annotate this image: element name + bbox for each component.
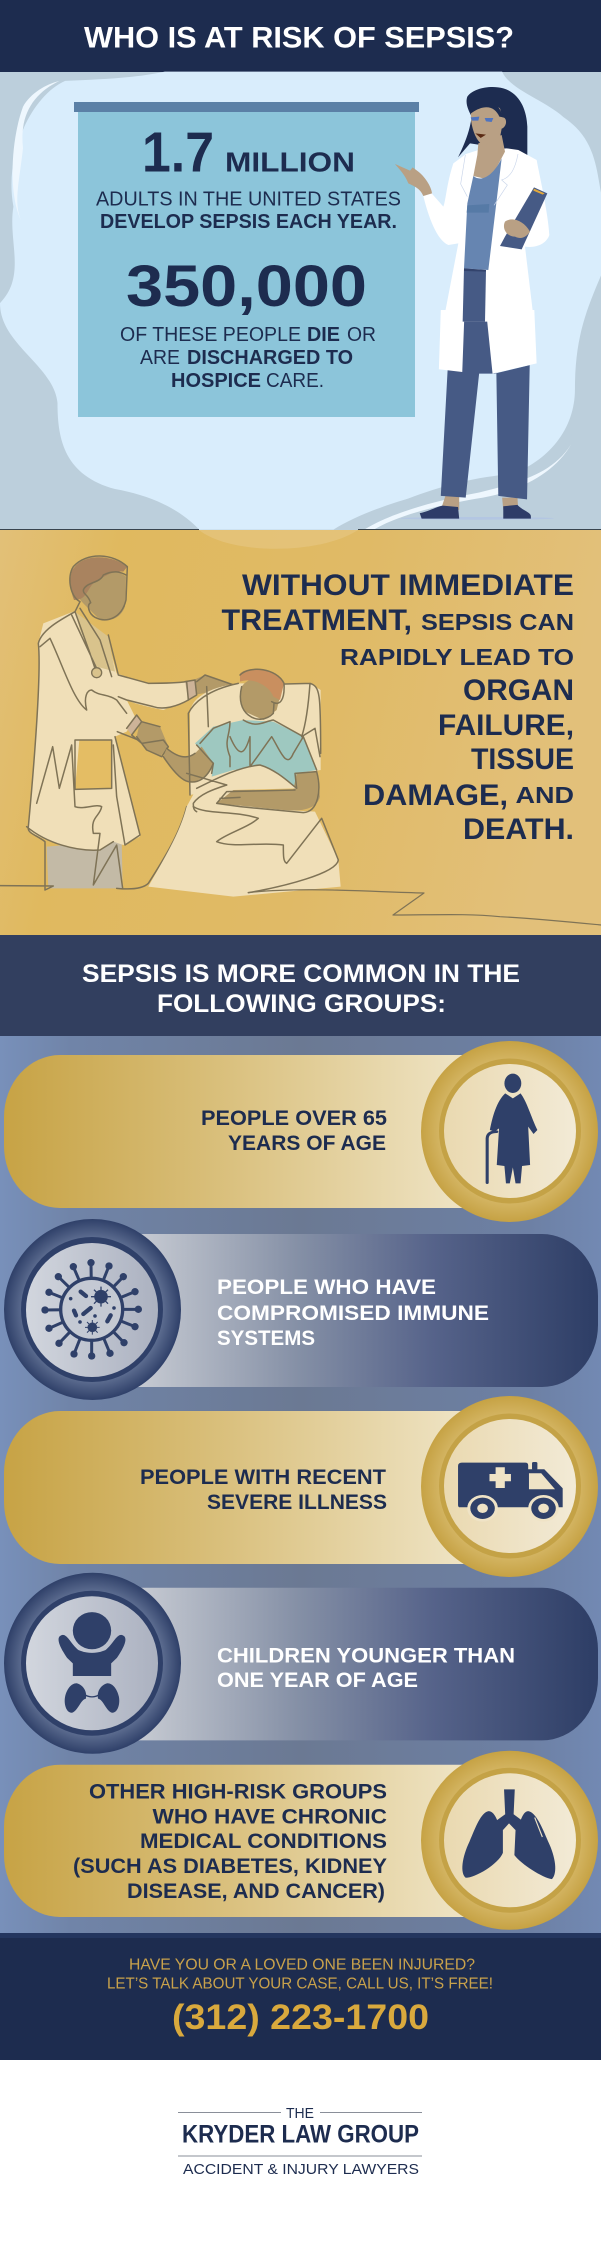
title: WHO IS AT RISK OF SEPSIS? xyxy=(84,22,514,54)
logo: Kryder Law Group: ACCIDENT & INJURY LAWYERS xyxy=(183,2162,419,2178)
text: without immediate treatment: SEPSIS CAN xyxy=(421,609,574,635)
text: compromised immune systems: PEOPLE WHO HAVE xyxy=(217,1276,436,1299)
text: without immediate treatment: FAILURE, xyxy=(438,709,574,742)
text: call to action xyxy=(107,1956,493,1992)
stat: 1.7 million: 1.7 xyxy=(142,120,214,184)
text: without immediate treatment: ORGAN xyxy=(463,674,574,707)
text: children younger than one: CHILDREN YOUNGER THAN xyxy=(217,1644,515,1667)
text: people over 65: YEARS OF AGE xyxy=(228,1132,386,1155)
text: adults in the US xyxy=(96,189,401,233)
text: without immediate treatment xyxy=(222,569,574,846)
text: recent severe illness: SEVERE ILLNESS xyxy=(207,1491,387,1514)
text: without immediate treatment: AND xyxy=(516,782,574,808)
text: adults in the US: ADULTS IN THE UNITED STATES xyxy=(96,189,401,211)
text: call to action: LET’S TALK ABOUT YOUR CASE, CALL US, IT’S FREE! xyxy=(107,1975,493,1992)
row: chronic conditions xyxy=(4,1751,598,1930)
row: compromised immune systems xyxy=(4,1219,598,1400)
logo: Kryder Law Group: THE xyxy=(286,2105,314,2122)
logo: Kryder Law Group xyxy=(178,2105,422,2178)
text: compromised immune systems: COMPROMISED IMMUNE xyxy=(217,1302,489,1325)
text: chronic conditions: WHO HAVE CHRONIC xyxy=(152,1805,387,1828)
text: recent severe illness: PEOPLE WITH RECENT xyxy=(140,1466,386,1489)
text: chronic conditions: (SUCH AS DIABETES, KIDNEY xyxy=(73,1855,387,1878)
text: die or hospice: OR xyxy=(347,324,376,346)
stat: 350,000: 350,000 xyxy=(126,254,367,319)
text: chronic conditions xyxy=(73,1780,387,1903)
floor line xyxy=(248,890,601,925)
header band xyxy=(0,0,601,72)
text: call to action: HAVE YOU OR A LOVED ONE BEEN INJURED? xyxy=(129,1956,475,1974)
panel: statistics board xyxy=(74,102,419,417)
text: die or hospice: HOSPICE xyxy=(171,370,261,392)
phone number: (312) 223-1700 xyxy=(172,1998,429,2037)
text: chronic conditions: MEDICAL CONDITIONS xyxy=(140,1830,387,1853)
icon: elderly woman xyxy=(487,1074,537,1183)
icon: baby xyxy=(59,1612,125,1713)
text: die or hospice: DIE xyxy=(307,324,340,346)
patient and bed xyxy=(148,669,341,897)
heading band: groups: FOLLOWING GROUPS: xyxy=(157,990,446,1018)
panel: gold treatment section xyxy=(0,530,601,935)
stat: 1.7 million xyxy=(142,120,355,184)
text: die or hospice: OF THESE PEOPLE xyxy=(120,324,301,346)
icon: lungs xyxy=(462,1789,555,1879)
text: chronic conditions: OTHER HIGH-RISK GROUPS xyxy=(89,1780,387,1804)
text: without immediate treatment: DEATH. xyxy=(463,813,574,846)
text: die or hospice xyxy=(120,324,376,392)
text: people over 65: PEOPLE OVER 65 xyxy=(201,1107,387,1130)
heading band: groups: SEPSIS IS MORE COMMON IN THE xyxy=(82,960,520,988)
heading band: groups xyxy=(0,935,601,1036)
text: children younger than one: ONE YEAR OF AGE xyxy=(217,1669,418,1692)
row: people over 65 xyxy=(4,1041,598,1222)
text: compromised immune systems xyxy=(217,1276,489,1350)
logo: Kryder Law Group: KRYDER LAW GROUP xyxy=(182,2121,419,2149)
illustration: doctor and patient line art xyxy=(0,556,601,925)
text: chronic conditions: DISEASE, AND CANCER) xyxy=(127,1880,385,1903)
stat: 1.7 million: MILLION xyxy=(225,146,355,178)
row: recent severe illness xyxy=(4,1396,598,1577)
text: without immediate treatment: WITHOUT IMMEDIATE xyxy=(242,569,574,602)
text: without immediate treatment: RAPIDLY LEAD TO xyxy=(340,644,574,670)
text: die or hospice: DISCHARGED TO xyxy=(187,347,353,369)
text: die or hospice: ARE xyxy=(140,347,180,369)
text: people over 65 xyxy=(201,1107,387,1155)
text: without immediate treatment: TISSUE xyxy=(471,743,574,776)
row: children younger than one xyxy=(4,1573,598,1754)
panel: blue groups background xyxy=(0,1036,601,1933)
text: recent severe illness xyxy=(140,1466,387,1514)
footer call to action xyxy=(0,1933,601,2060)
icon: ambulance xyxy=(458,1462,563,1522)
illustration: woman doctor xyxy=(395,87,554,520)
text: adults in the US: DEVELOP SEPSIS EACH YEAR. xyxy=(100,211,397,233)
text: without immediate treatment: DAMAGE, xyxy=(363,779,508,812)
text: children younger than one xyxy=(217,1644,515,1692)
text: without immediate treatment: TREATMENT, xyxy=(222,604,412,637)
text: compromised immune systems: SYSTEMS xyxy=(217,1327,315,1350)
icon: virus xyxy=(41,1259,142,1360)
hero background xyxy=(0,72,601,530)
doctor xyxy=(0,556,237,890)
text: die or hospice: CARE. xyxy=(266,370,324,392)
